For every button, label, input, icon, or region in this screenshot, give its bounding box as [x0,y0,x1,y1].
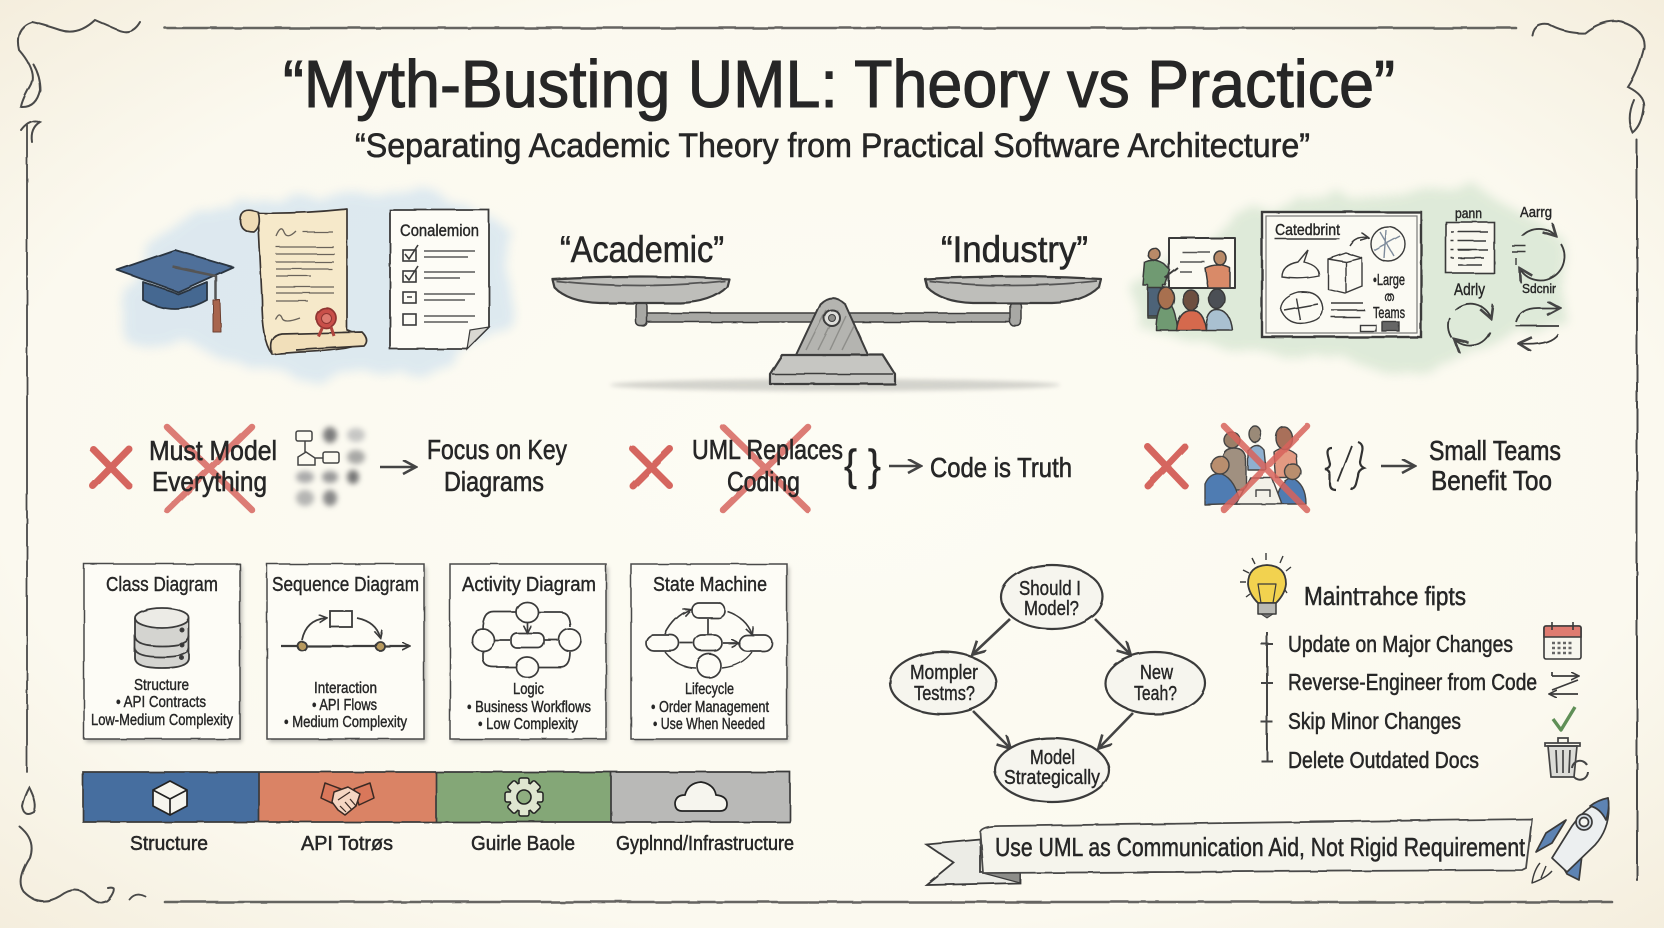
segment: guide [436,772,611,822]
icon: red cross [633,449,670,486]
icon: blurred diagram [296,427,365,506]
icon: agile practice cycles: Adrly [1454,280,1485,299]
card details: • API Flows [312,697,377,714]
icon: agile practice cycles: pann [1455,205,1482,221]
arrow [380,466,415,468]
panel: academic illustration [117,190,512,380]
icon: database [135,608,189,668]
segment: deployment [611,772,790,822]
icon: check mark [1553,707,1575,730]
colour legend bar [83,772,794,855]
truth text: Small Teams [1429,435,1561,466]
big strike-through cross [1224,426,1307,510]
card details: Low-Medium Complexity [91,712,233,729]
card details: Structure [134,677,189,694]
icon: light bulb [1240,553,1291,618]
legend labels: Gyplnnd/Infrastructure [616,833,794,855]
panel: Sequence Diagram card [267,564,426,742]
myth text: Must Model [149,435,277,466]
icon: red cross [1148,447,1185,486]
icon: code brackets [1325,442,1364,490]
timeline [1261,632,1273,762]
icon: curly braces: { } [844,441,881,490]
card details: • Business Workflows [467,699,591,716]
node: new team: New [1140,662,1173,684]
subtitle: “Separating Academic Theory from Practical Software Architecture” [355,127,1310,165]
label: Academic: “Academic” [560,229,724,270]
card title: Sequence Diagram [272,574,419,596]
node: model strategically [995,738,1109,802]
myth 2: UML Replaces Coding [633,427,1072,510]
node: new team: Teah? [1134,683,1177,705]
segment: API [259,772,436,822]
truth text: Benefit Too [1431,465,1552,496]
myth 1: Must Model Everything [93,427,567,510]
card details [651,681,770,733]
myth text [692,434,843,497]
myth text: Everything [152,466,267,497]
card details: • API Contracts [116,694,206,711]
callout: takeaway ribbon [926,798,1609,885]
card details: • Use When Needed [653,716,765,733]
icon: red cross [93,449,129,486]
watercolor wash green [1135,190,1565,370]
node: complex systems: Testms? [914,683,975,705]
icon: graduation cap [117,250,233,332]
icon: checklist page: Conalemion [400,221,479,240]
bar outline [83,772,790,822]
tips heading: Maintтahce fipts [1304,581,1466,611]
tips list: Delete Outdated Docs [1288,747,1479,773]
legend labels: API Totrøs [301,833,393,855]
node: model strategically: Model [1030,747,1075,769]
node: model strategically: Strategically [1004,767,1100,789]
truth text [427,434,567,497]
whiteboard [1262,212,1421,337]
card details [91,677,233,729]
tips list: Skip Minor Changes [1288,708,1461,734]
myth text [149,435,277,497]
node: should I model [1001,565,1103,629]
panel: Class Diagram card [84,564,242,742]
card details: • Medium Complexity [284,714,407,731]
icon: diploma scroll [240,209,367,354]
tips list [1288,631,1537,773]
icon: agile practice cycles: Aarrg [1520,204,1552,221]
icon: rocket [1532,798,1609,883]
panel: State Machine card [631,564,789,742]
icon: presentation group [1143,238,1235,330]
node: complex systems [890,652,996,714]
arrows [973,619,1133,748]
panel: industry illustration [1135,190,1565,370]
truth text: Diagrams [444,466,544,497]
legend labels: Guirle Baole [471,833,575,855]
icon: sequence flow [281,611,409,650]
icon: team around table [1205,426,1306,505]
node: new team [1105,652,1205,714]
icon: calendar [1544,622,1581,659]
title: “Myth-Busting UML: Theory vs Practice” [283,47,1395,122]
big strike-through cross [723,427,808,510]
icon: handshake [321,783,374,815]
icon: checklist page [390,210,489,349]
whiteboard: Catedbrint [1275,222,1340,239]
panel: Activity Diagram card [450,564,608,742]
ribbon tail [926,839,1020,885]
icon: agile practice cycles [1446,204,1564,346]
card details: Lifecycle [685,681,734,698]
card title: Class Diagram [106,574,218,596]
card details [284,680,407,731]
truth text: Focus on Key [427,434,567,465]
whiteboard: •Large [1373,272,1405,289]
arrow [1381,465,1414,467]
icon: swap arrows [1550,672,1578,694]
panel: maintenance tips [1240,553,1588,780]
node: should I model: Model? [1024,598,1079,620]
node: complex systems: Mompler [910,662,978,684]
truth text: Code is Truth [930,452,1072,483]
legend labels [130,833,794,855]
card details [467,681,591,733]
ribbon body [980,819,1532,873]
icon: agile practice cycles: Sdcnir [1522,281,1557,296]
myth text: Coding [727,466,800,497]
watercolor wash blue [118,190,512,380]
icon: trash with recycle [1545,738,1588,780]
icon: cloud [675,782,727,811]
card details: Logic [513,681,544,698]
icon: activity flow [472,602,581,677]
card title: State Machine [653,574,767,596]
card details: • Low Complexity [478,716,578,733]
card title: Activity Diagram [462,574,596,596]
decision flowchart [890,565,1205,802]
tips list: Reverse-Engineer from Code [1288,669,1537,695]
icon: state flow [646,603,772,678]
card details: Interaction [314,680,377,697]
label: Industry: “Industry” [941,229,1088,270]
myth 3: Small Teams [1148,426,1561,510]
truth text [1429,435,1561,496]
myth text: UML Replaces [692,434,843,465]
whiteboard: ത [1384,289,1394,304]
tips list: Update on Major Changes [1288,631,1513,657]
balance scale [552,276,1101,391]
icon: gear [505,778,543,816]
icon: cube [153,781,187,815]
node: should I model: Should I [1019,578,1081,600]
callout text: Use UML as Communication Aid, Not Rigid Requirement [995,832,1526,862]
segment: structure [83,772,259,822]
whiteboard: Teams [1373,305,1405,322]
arrow [889,465,920,467]
big strike-through cross [167,427,252,510]
legend labels: Structure [130,833,208,855]
card details: • Order Management [651,699,770,716]
